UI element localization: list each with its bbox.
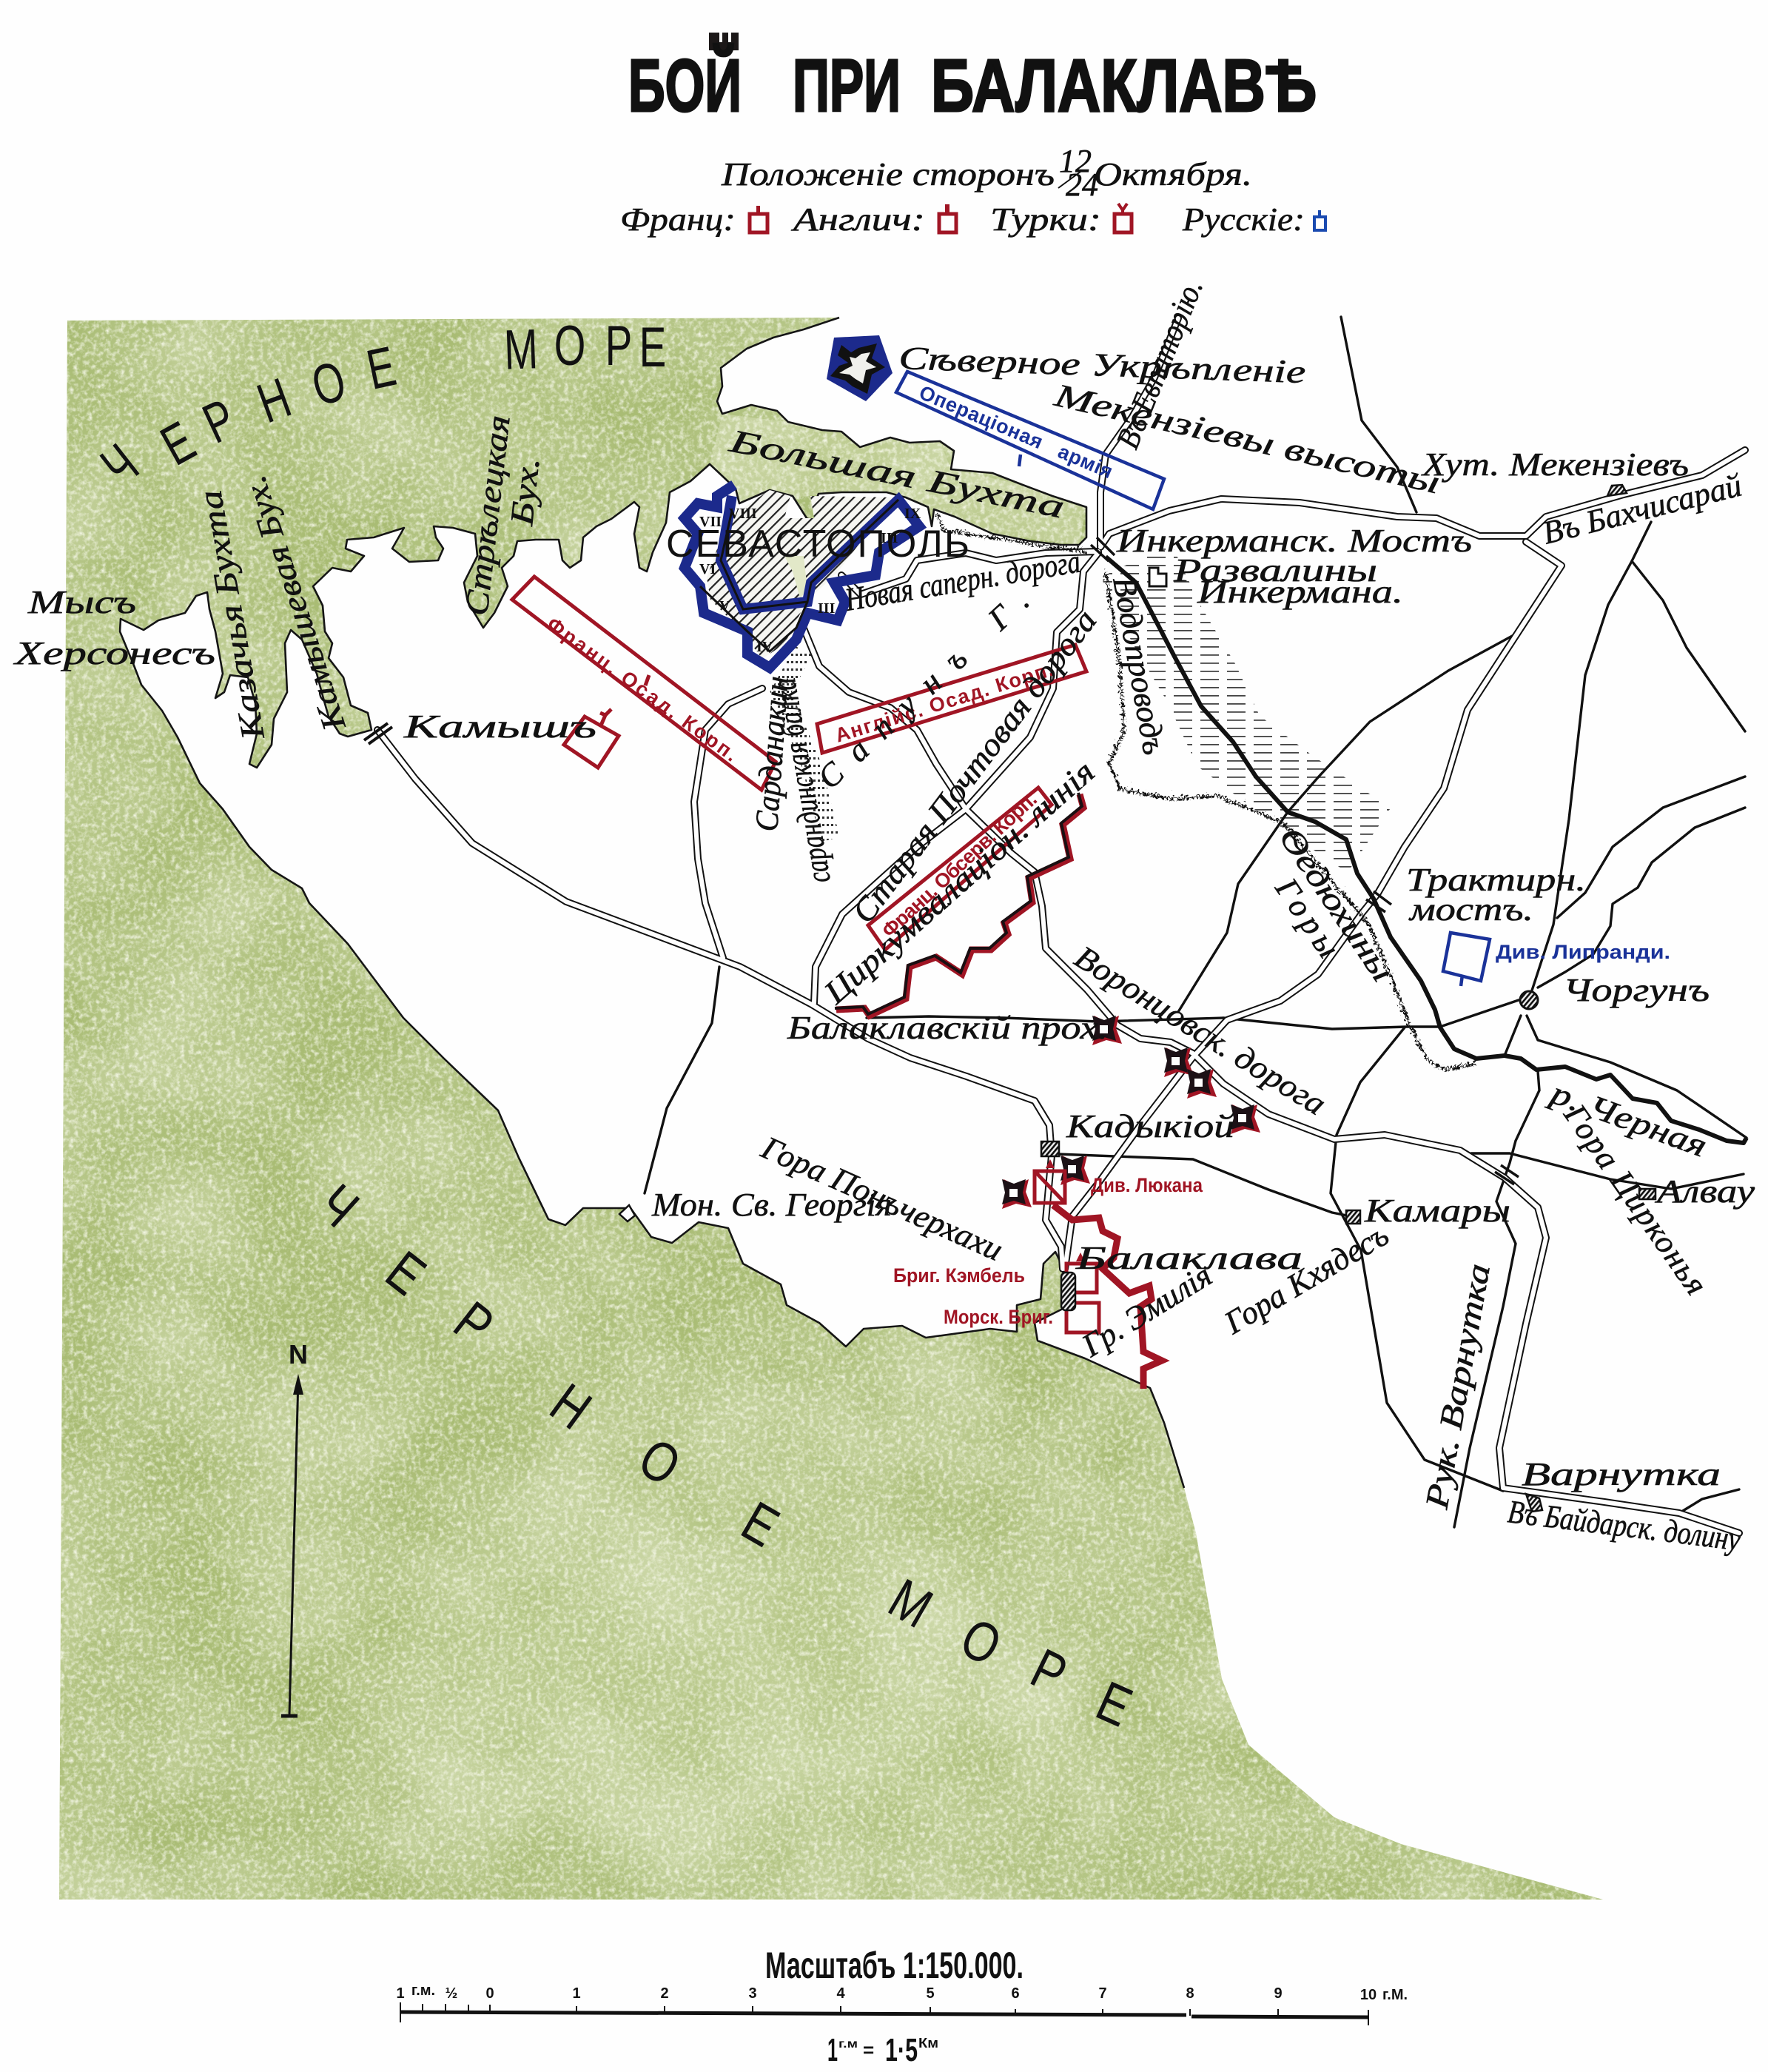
- Balaklava line: [1053, 1205, 1162, 1389]
- label: to Evpatoria: Въ Евпаторію.: [1109, 274, 1210, 454]
- legend: Франц:: [620, 201, 736, 238]
- label: Kamary: Камары: [1364, 1193, 1510, 1229]
- Kamysh camp box: [564, 709, 619, 768]
- label: Chernaya river: р. Черная: [1544, 1073, 1712, 1164]
- sea letters: north: О: [554, 315, 585, 378]
- label: Balaklava pass: Балаклавскій прох.: [787, 1010, 1108, 1046]
- scale equivalence: [827, 2032, 938, 2068]
- label: Mount Pontcherkhi: Гора Понъчерхахи: [756, 1129, 1009, 1268]
- scale bar: 0: [485, 1985, 494, 2002]
- subtitle: Октября.: [1094, 156, 1252, 192]
- label: Campbell brigade: Бриг. Кэмбель: [893, 1264, 1025, 1287]
- label: Alvau: Алвау: [1654, 1173, 1755, 1210]
- sea letters: south: Е: [374, 1239, 437, 1307]
- label: Sarandinaki: Сарданакин: [748, 675, 796, 833]
- bastion numerals: IV: [756, 639, 773, 655]
- operational army box: [896, 372, 1164, 509]
- scale bar: 8: [1186, 1985, 1194, 2002]
- sea letters: south: [306, 1173, 1140, 1739]
- scale bar: 7: [1098, 1985, 1107, 2002]
- label: old post road: Старая Почтовая дорога: [845, 603, 1104, 930]
- label: Vorontsov road: Воронцовск. дорога: [1069, 939, 1332, 1122]
- label: aqueduct: Водопроводъ: [1106, 574, 1173, 757]
- bastion numerals: VIII: [729, 506, 757, 522]
- label: bridge: мостъ.: [1408, 891, 1533, 928]
- bastion numerals: VII: [699, 514, 722, 530]
- sea letters: north: Н: [250, 366, 299, 435]
- label: Liprandi division: Див. Липранди.: [1496, 941, 1670, 963]
- label: Sarandinaki ravine: сарандинская балка: [766, 676, 838, 886]
- label: Mekenzie heights: Мекензіевы высоты: [1050, 377, 1443, 500]
- label: of Inkerman: Инкермана.: [1197, 574, 1403, 610]
- label: Chorgun: Чоргунъ: [1563, 972, 1710, 1008]
- label: North fort: Сѣверное Укрѣпленіе: [898, 340, 1306, 390]
- scale bar: 2: [660, 1985, 669, 2002]
- sea letters: south: Ч: [306, 1173, 371, 1239]
- label: Chersonese: Херсонесъ: [13, 635, 215, 671]
- sea letters: south: Р: [1022, 1637, 1076, 1706]
- English siege corps box: Англійс. Осад. Корп.: [833, 658, 1056, 747]
- label: Mount Emilia: Гр. Эмилія: [1075, 1257, 1218, 1364]
- scale equivalence: 1·5: [885, 2032, 918, 2068]
- label: Streletskaya: Стрѣлецкая: [458, 413, 517, 617]
- label: Sapun hill: Сапунъ Г.: [810, 582, 1036, 796]
- sea letters: south: Е: [1088, 1669, 1140, 1739]
- subtitle: Положеніе сторонъ: [721, 156, 1055, 192]
- scale equivalence: =: [863, 2039, 874, 2061]
- north arrow: [281, 1339, 308, 1716]
- settlements: [619, 485, 1656, 1512]
- bastion numerals: III: [881, 530, 898, 546]
- double roads: [377, 318, 1745, 1533]
- label: St George monastery: Мон. Св. Георгія: [651, 1187, 892, 1223]
- hills hatching: [781, 560, 1369, 840]
- label: Mount Tsirkonya: Гора Цирконья: [1556, 1097, 1715, 1301]
- subtitle: 12: [1059, 143, 1092, 179]
- Sevastopol city: [685, 485, 919, 668]
- bastion numerals: V: [719, 598, 730, 614]
- label: Traktir: Трактирн.: [1406, 862, 1586, 898]
- scale bar: г.М.: [1382, 1987, 1408, 2003]
- label: Marine brigade: Морск. Бриг.: [944, 1306, 1053, 1328]
- scale bar: 1: [396, 1985, 405, 2002]
- north arrow: N: [289, 1339, 308, 1369]
- subtitle: 24: [1066, 167, 1098, 203]
- north fort: [827, 335, 893, 401]
- scale bar: г.м.: [411, 1982, 435, 1999]
- legend: Англич:: [790, 201, 925, 238]
- bastion numerals: III: [818, 600, 836, 617]
- operational army box: Операціоная армія: [916, 381, 1116, 483]
- redoubts: [1002, 1016, 1260, 1209]
- label: Balaklava: Балаклава: [1075, 1240, 1303, 1276]
- label: Sevastopol: СЕВАСТОПОЛЬ: [666, 523, 969, 566]
- label: bay abbreviation: Бух.: [503, 455, 547, 528]
- label: Kadikoi: Кадыкіой: [1066, 1108, 1234, 1144]
- allied camp boxes: [1035, 1159, 1099, 1332]
- label: ruins: Развалины: [1173, 552, 1377, 589]
- sea letters: south: Р: [443, 1290, 505, 1358]
- French observation corps box: Франц. Обсерв. Корп.: [878, 788, 1041, 942]
- legend: [620, 201, 1325, 238]
- title: БОЙ: [628, 44, 742, 127]
- sea letters: north: О: [306, 349, 352, 418]
- legend: Русскіе:: [1182, 201, 1305, 238]
- title: БАЛАКЛАВѢ: [931, 44, 1317, 127]
- sea letters: north: Е: [362, 335, 401, 402]
- scale equivalence: г.м: [838, 2038, 858, 2051]
- sea letters: north: М: [503, 318, 539, 382]
- scale bar: ½: [446, 1985, 457, 2002]
- label: Mekenzie farm: Хут. Мекензіевъ: [1421, 446, 1689, 483]
- label: Mount Khyades: Гора Кхядесъ: [1217, 1216, 1395, 1341]
- sea letters: north: Р: [194, 387, 245, 456]
- scale equivalence: Км: [918, 2036, 938, 2051]
- sea letters: north: Е: [151, 410, 205, 478]
- Liprandi division box: [1443, 933, 1490, 986]
- label: heights: Горы: [1268, 871, 1347, 964]
- label: Kazachya bay: Казачья Бухта: [192, 487, 272, 743]
- bastion numerals: VI: [699, 561, 716, 577]
- scale bar: 4: [836, 1985, 845, 2002]
- label: Varnutka: Варнутка: [1522, 1456, 1721, 1492]
- scale bar: 3: [748, 1985, 757, 2002]
- title: [628, 33, 1317, 127]
- legend: Турки:: [990, 201, 1101, 238]
- label: Great Bay: Большая Бухта: [725, 422, 1068, 526]
- label: new sapper road: Новая саперн. дорога: [842, 543, 1083, 618]
- bridges: [364, 537, 1519, 1184]
- label: to Bakhchisarai: Въ Бахчисарай: [1539, 467, 1745, 551]
- label: Kamyshevaya bay: Камышевая Бух.: [236, 471, 353, 736]
- sea letters: south: М: [878, 1566, 943, 1640]
- circumvallation line: [835, 793, 1083, 1016]
- label: Inkerman bridge: Инкерманск. Мостъ: [1116, 523, 1472, 559]
- scale equivalence: 1: [827, 2032, 838, 2068]
- sea letters: north: Ч: [90, 432, 150, 498]
- scale bar: 10: [1360, 1987, 1377, 2003]
- sea letters: south: О: [628, 1426, 691, 1498]
- label: Fedyukhin: Ѳедюхины: [1272, 820, 1402, 988]
- sea letters: south: О: [951, 1606, 1011, 1678]
- sea letters: north: [90, 315, 666, 498]
- scale bar: 5: [926, 1985, 935, 2002]
- label: Lucan division: Див. Люкана: [1091, 1174, 1203, 1196]
- scale title: Масштабъ 1:150.000.: [765, 1945, 1024, 1986]
- river Chernaya: [1106, 557, 1747, 1143]
- French siege corps box: [512, 577, 776, 790]
- bastion numerals: IX: [904, 506, 921, 522]
- thin roads and streams: [645, 317, 1747, 1527]
- coastline: [120, 318, 1184, 1488]
- scale bar: [396, 1982, 1408, 2025]
- sea letters: north: Р: [605, 315, 632, 378]
- scale bar: 9: [1274, 1985, 1283, 2002]
- sea letters: north: Е: [639, 316, 666, 379]
- French siege corps box: Франц. Осад. Корп.: [542, 613, 742, 766]
- sea letters: south: Н: [540, 1372, 602, 1441]
- English siege corps box: [817, 645, 1086, 753]
- label: Cape: Мысъ: [27, 584, 136, 620]
- label: circumvallation line: Циркумвалаціон. линія: [816, 753, 1102, 1011]
- title: ПРИ: [793, 44, 901, 127]
- subtitle: [721, 143, 1252, 203]
- bastion numerals: [699, 506, 921, 655]
- label: Varnutka brook: Рук. Варнутка: [1418, 1261, 1497, 1512]
- scale bar: 1: [572, 1985, 581, 2002]
- label: Kamysh: Камышъ: [403, 708, 596, 745]
- aqueduct: [934, 511, 1471, 1067]
- scale bar: 6: [1011, 1985, 1020, 2002]
- sea: [59, 318, 1603, 1900]
- sea letters: south: Е: [732, 1489, 789, 1559]
